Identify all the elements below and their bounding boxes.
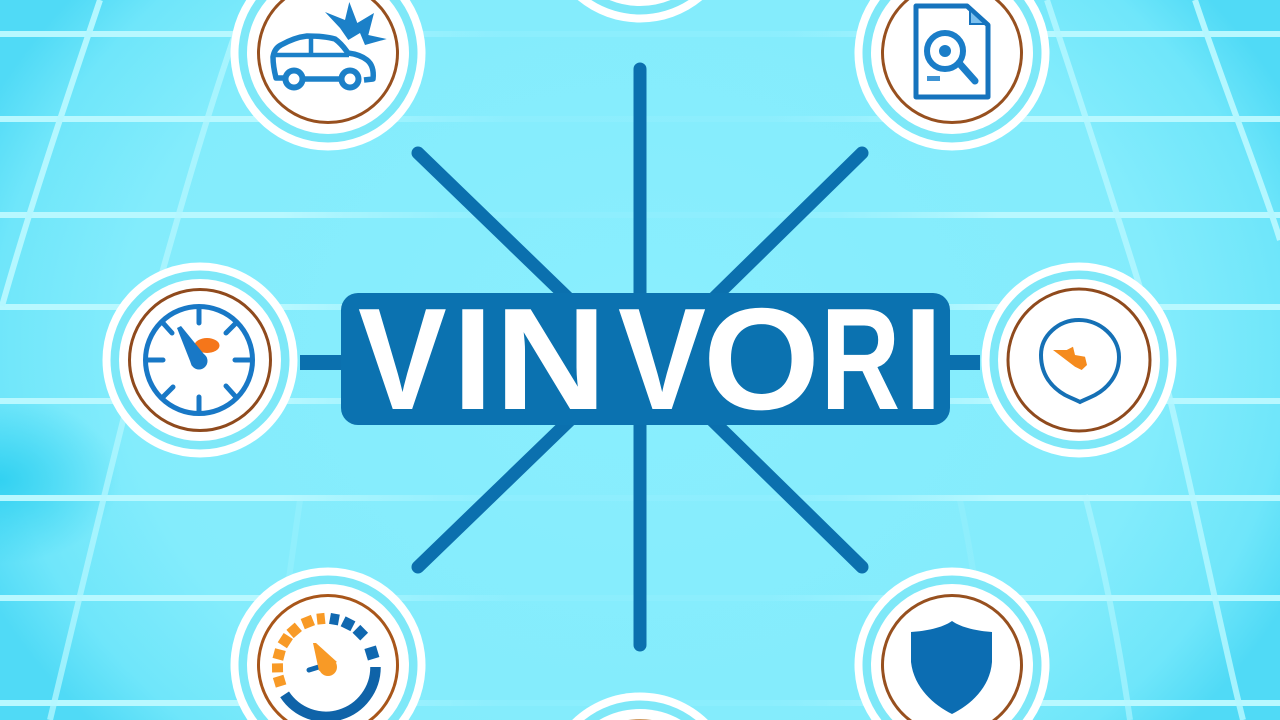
- icon: car: [273, 36, 373, 88]
- node: top centre: [578, 0, 702, 23]
- node: shield outline: [986, 266, 1172, 454]
- connector left: [300, 355, 350, 370]
- node: speedometer: [230, 567, 426, 720]
- title text: V: [358, 278, 447, 440]
- title text: V: [618, 278, 706, 440]
- icon: orange hand: [194, 338, 220, 353]
- title text: I: [903, 278, 943, 440]
- icon: orange gauge segments: [272, 613, 325, 688]
- title text: I: [453, 278, 493, 440]
- connector right: [940, 355, 980, 370]
- node: car crash: [230, 0, 425, 151]
- icon: page fold: [970, 10, 985, 24]
- node: solid shield: [854, 567, 1050, 720]
- node: document search: [855, 0, 1050, 151]
- icon: small bar: [927, 76, 940, 81]
- title text: N: [495, 278, 607, 440]
- icon: blue hand: [177, 326, 208, 370]
- title background: [341, 293, 950, 425]
- icon: shield outline: [1041, 320, 1119, 402]
- icon: small blue needle: [309, 666, 322, 670]
- title badge: [341, 278, 950, 440]
- spokes: [418, 69, 862, 645]
- icon: magnifier: [927, 33, 975, 81]
- icon: impact burst: [325, 2, 387, 45]
- title text: R: [821, 278, 900, 440]
- icon: blue gauge segments: [329, 613, 379, 660]
- icon: solid shield: [911, 621, 992, 714]
- node: bottom centre: [572, 692, 708, 720]
- icon: blue gauge arc: [285, 667, 376, 717]
- title text: O: [703, 278, 820, 440]
- icon: clock face: [146, 306, 252, 414]
- node: clock: [106, 266, 294, 454]
- icon: orange needle: [313, 643, 337, 676]
- icon: document: [916, 6, 988, 97]
- icon: orange mark: [1053, 347, 1087, 370]
